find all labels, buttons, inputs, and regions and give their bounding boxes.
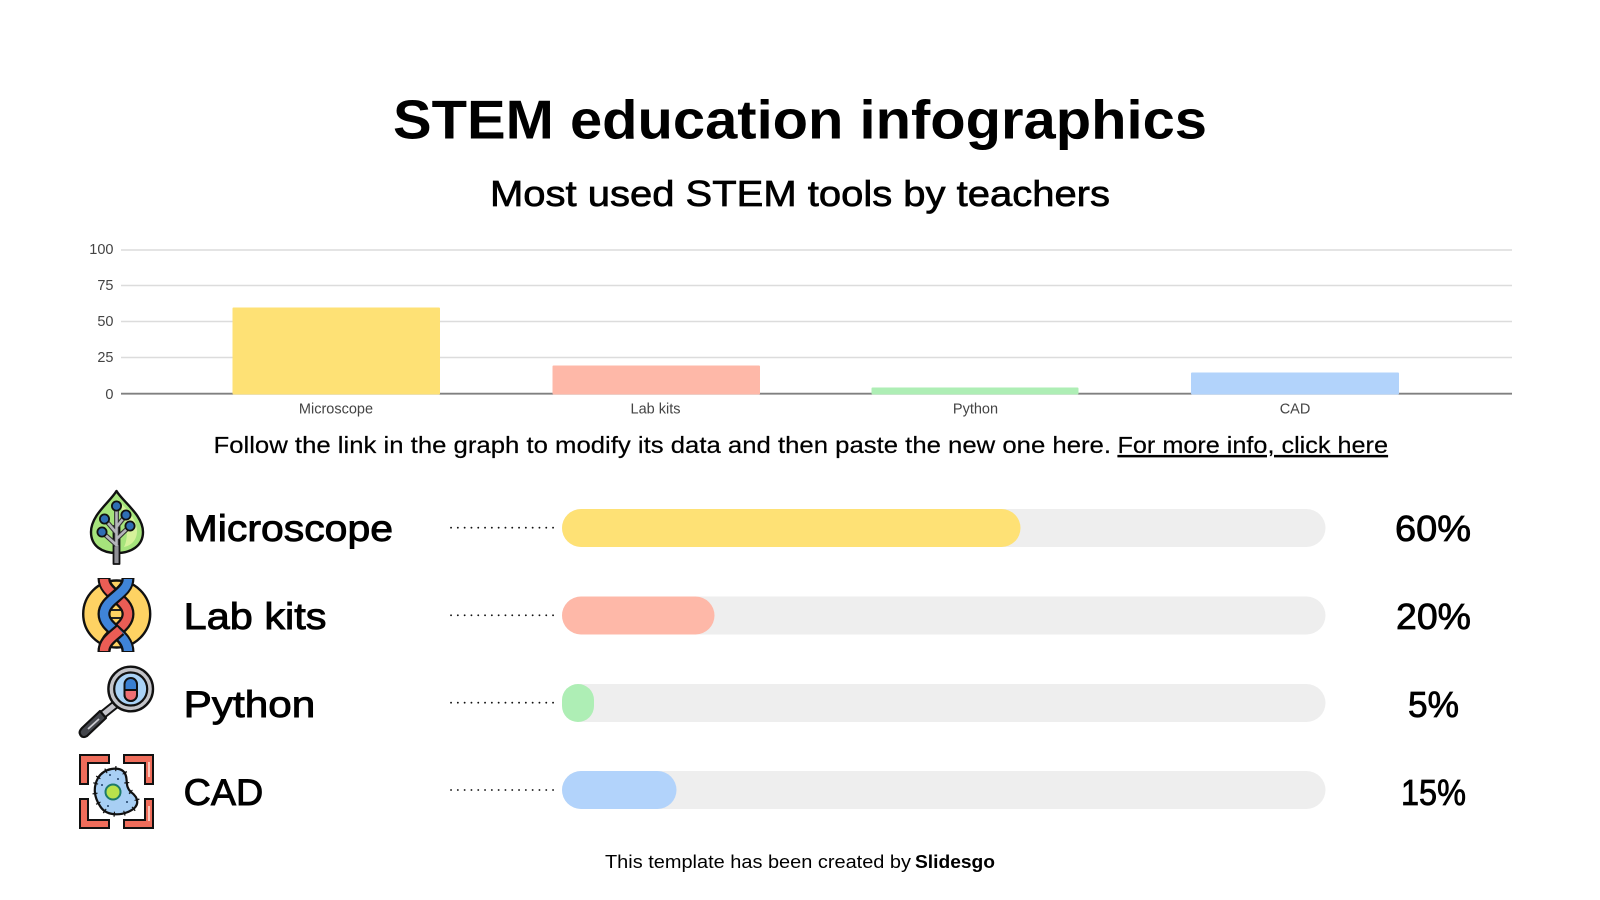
bar: Microscope [232, 308, 440, 394]
subtitle: Most used STEM tools by teachers [490, 173, 1110, 214]
label: Python [184, 684, 315, 725]
chart y axis labels: 100 [89, 242, 114, 258]
label: Microscope [184, 508, 393, 549]
label: CAD [184, 772, 263, 813]
label: Lab kits [184, 596, 326, 637]
row: Microscope [91, 491, 1471, 564]
percentage: 60% [1395, 508, 1471, 549]
progress fill [562, 684, 594, 722]
bar: Python [872, 388, 1078, 394]
dotted leader [451, 527, 558, 529]
progress track [562, 509, 1326, 547]
percentage: 15% [1401, 772, 1466, 813]
percentage: 20% [1396, 596, 1471, 637]
bar: Lab kits [552, 366, 760, 394]
dotted leader [451, 789, 558, 791]
chart y axis labels: 0 [105, 387, 114, 403]
icon: magnifying glass [80, 667, 153, 737]
row: CAD [80, 755, 1466, 828]
bar chart: most used STEM tools [89, 242, 1512, 418]
chart y axis labels: 75 [97, 278, 114, 294]
chart y axis labels [89, 242, 114, 403]
dotted leader [451, 614, 558, 616]
chart category labels [299, 402, 1310, 418]
bar: CAD [1191, 372, 1399, 394]
chart y axis labels: 50 [97, 314, 114, 330]
progress track [562, 684, 1326, 722]
progress fill [562, 509, 1020, 547]
progress fill [562, 596, 714, 634]
chart category labels: Python [953, 402, 998, 418]
row: Lab kits [83, 578, 1471, 652]
icon: leaf tree [91, 491, 143, 564]
dotted leader [451, 702, 558, 704]
chart note text: Follow the link in the graph to modify its data and then paste the new one here. [214, 432, 1111, 458]
chart note text [214, 432, 1388, 458]
percentage: 5% [1408, 684, 1459, 725]
row: Python [80, 667, 1459, 737]
footer credit: Slidesgo [915, 851, 995, 872]
chart category labels: Lab kits [631, 402, 680, 418]
title: STEM education infographics [393, 88, 1207, 150]
icon: cell scan [80, 755, 153, 828]
link: For more info, click here [1118, 432, 1388, 458]
progress track [562, 596, 1326, 634]
chart y axis labels: 25 [97, 350, 114, 366]
chart category labels: Microscope [299, 402, 373, 418]
progress track [562, 771, 1326, 809]
icon: DNA helix [83, 578, 150, 652]
chart category labels: CAD [1280, 402, 1310, 418]
progress fill [562, 771, 676, 809]
footer credit: This template has been created by [605, 851, 912, 872]
